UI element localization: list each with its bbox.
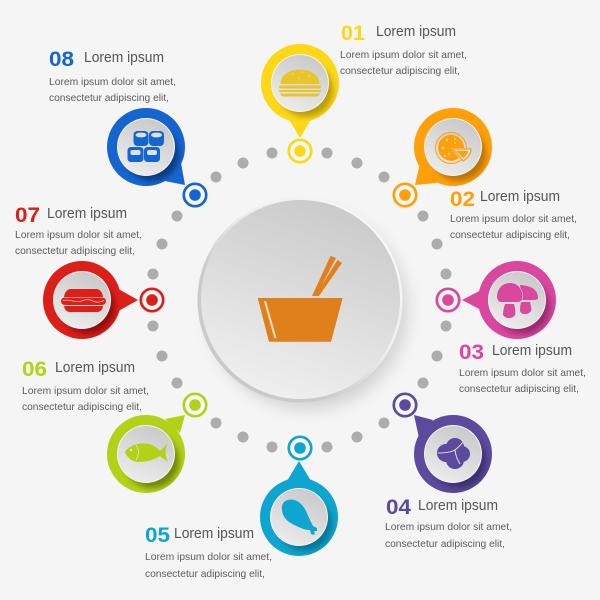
- central plate with noodle bowl: [198, 198, 406, 408]
- text block 07: Lorem ipsum: [47, 206, 127, 222]
- text block 06: [22, 358, 149, 413]
- text block 03: Lorem ipsum dolor sit amet,: [459, 367, 586, 379]
- text block 03: Lorem ipsum: [492, 343, 572, 359]
- icon: fish: [125, 443, 168, 462]
- text block 03: consectetur adipiscing elit,: [459, 383, 579, 395]
- text block 05: Lorem ipsum dolor sit amet,: [145, 551, 272, 563]
- text block 04: 04: [386, 496, 411, 519]
- text block 02: Lorem ipsum dolor sit amet,: [450, 213, 577, 225]
- text block 05: 05: [145, 524, 170, 547]
- text block 04: [385, 496, 512, 550]
- step 06 marker: fish: [107, 394, 206, 493]
- text block 01: consectetur adipiscing elit,: [340, 65, 460, 77]
- text block 06: consectetur adipiscing elit,: [22, 401, 142, 413]
- text block 03: [459, 341, 586, 395]
- icon: burger: [279, 70, 321, 96]
- icon: mushrooms: [497, 283, 538, 318]
- icon: meat: [437, 438, 470, 469]
- text block 02: Lorem ipsum: [480, 189, 560, 205]
- text block 02: [450, 188, 577, 241]
- icon: noodle bowl: [258, 256, 343, 342]
- text block 04: Lorem ipsum: [418, 498, 498, 514]
- text block 06: 06: [22, 358, 47, 381]
- icon: pizza: [436, 132, 471, 164]
- text block 05: [145, 524, 272, 580]
- text block 08: Lorem ipsum: [84, 50, 164, 66]
- step 08 marker: sushi: [107, 108, 206, 206]
- text block 08: 08: [49, 48, 74, 71]
- step 05 marker: chicken leg: [260, 437, 338, 556]
- text block 07: consectetur adipiscing elit,: [15, 245, 135, 257]
- text block 04: consectetur adipiscing elit,: [385, 538, 505, 550]
- text block 05: consectetur adipiscing elit,: [145, 568, 265, 580]
- text block 07: Lorem ipsum dolor sit amet,: [15, 229, 142, 241]
- text block 02: 02: [450, 188, 475, 211]
- text block 06: Lorem ipsum: [55, 360, 135, 376]
- dotted ring: [148, 148, 452, 452]
- text block 08: [49, 48, 176, 104]
- step 04 marker: meat: [394, 394, 492, 493]
- text block 01: Lorem ipsum dolor sit amet,: [340, 49, 467, 61]
- text block 07: 07: [15, 204, 40, 227]
- text block 06: Lorem ipsum dolor sit amet,: [22, 385, 149, 397]
- text block 03: 03: [459, 341, 484, 364]
- icon: hot dog: [61, 289, 106, 312]
- text block 01: Lorem ipsum: [376, 24, 456, 40]
- step 07 marker: hot dog: [43, 261, 163, 339]
- icon: chicken leg: [282, 499, 317, 535]
- step 01 marker: burger: [261, 44, 339, 162]
- text block 07: [15, 204, 142, 257]
- text block 05: Lorem ipsum: [174, 526, 254, 542]
- step 02 marker: pizza: [394, 108, 492, 206]
- text block 08: Lorem ipsum dolor sit amet,: [49, 76, 176, 88]
- text block 04: Lorem ipsum dolor sit amet,: [385, 521, 512, 533]
- text block 02: consectetur adipiscing elit,: [450, 229, 570, 241]
- step 03 marker: mushrooms: [437, 261, 556, 339]
- text block 08: consectetur adipiscing elit,: [49, 92, 169, 104]
- text block 01: 01: [341, 22, 365, 45]
- icon: sushi rolls: [128, 131, 164, 162]
- text block 01: [340, 22, 467, 77]
